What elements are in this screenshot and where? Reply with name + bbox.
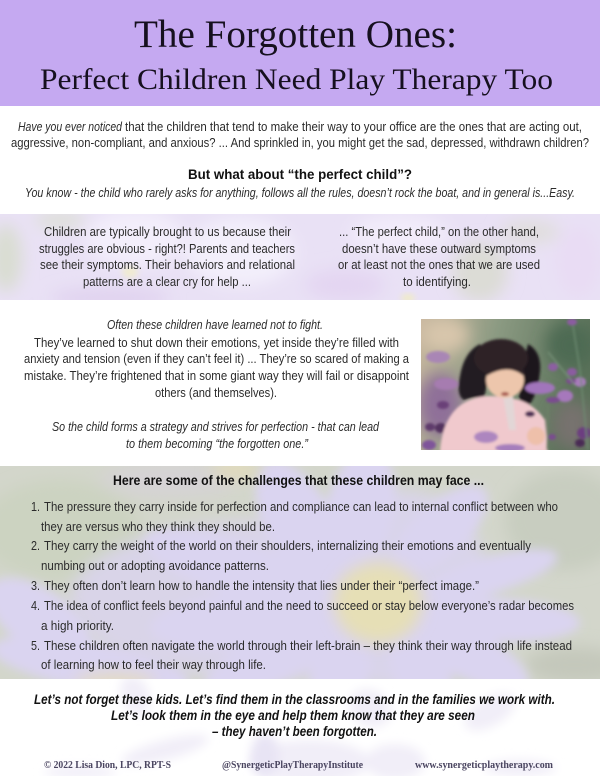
title line 1: The Forgotten Ones: — [134, 13, 457, 56]
right column text: or at least not the ones that we are used — [338, 258, 540, 272]
title line 2: Perfect Children Need Play Therapy Too — [40, 63, 553, 96]
challenge 1 — [31, 500, 558, 534]
challenge 1: they are versus who they think they should be. — [41, 520, 275, 534]
challenge 1: The pressure they carry inside for perfection and compliance can lead to internal conflict between who — [44, 500, 558, 514]
closing message — [34, 692, 555, 739]
left pigtail — [459, 344, 490, 400]
text block: learned not to fight: to them becoming “the forgotten one.” — [126, 437, 309, 451]
band background flowers — [0, 214, 600, 300]
text block: learned not to fight: So the child forms a strategy and strives for perfection - that can lead — [52, 420, 380, 434]
right column text: to identifying. — [403, 275, 471, 289]
challenge 3: They often don’t learn how to handle the intensity that lies under their “perfect image.” — [44, 579, 479, 593]
challenge 3: 3. — [31, 579, 40, 593]
challenge 5: 5. — [31, 639, 40, 653]
text block: learned not to fight: Often these children have learned not to fight. — [107, 318, 323, 332]
hand — [527, 427, 545, 445]
intro text — [11, 120, 589, 150]
right column text: doesn’t have these outward symptoms — [342, 242, 536, 256]
closing message: – they haven’t been forgotten. — [212, 724, 377, 739]
header banner — [0, 0, 600, 106]
flowers — [525, 382, 555, 394]
left column text: patterns are a clear cry for help ... — [83, 275, 251, 289]
subheading: perfect child: But what about “the perfect child”? — [188, 167, 412, 182]
challenge 2: numbing out or adopting avoidance patterns. — [41, 559, 269, 573]
left column text: see their symptoms. Their behaviors and relational — [40, 258, 295, 272]
challenge 2: 2. — [31, 539, 40, 553]
challenges heading: Here are some of the challenges that these children may face ... — [113, 473, 484, 488]
challenge 2 — [31, 539, 532, 573]
left column text: struggles are obvious - right?! Parents and teachers — [39, 242, 295, 256]
challenge 4: 4. — [31, 599, 40, 613]
closing message: Let’s look them in the eye and help them know that they are seen — [111, 708, 475, 723]
challenge 4: a high priority. — [41, 619, 114, 633]
right column text — [338, 225, 540, 289]
photo: girl among purple flowers — [418, 317, 594, 452]
challenges band background: daisy — [0, 466, 600, 679]
footer background: faint flowers — [44, 671, 556, 776]
head of hair — [474, 339, 528, 377]
right pigtail — [519, 344, 540, 410]
intro text: Have you ever noticed — [18, 120, 123, 134]
challenge 5 — [31, 639, 572, 672]
text block: learned not to fight — [24, 318, 409, 451]
challenge 4 — [31, 599, 574, 633]
panel: challenges band — [0, 466, 600, 679]
text block: learned not to fight: They’ve learned to shut down their emotions, yet inside they’re filled with — [34, 336, 399, 350]
face — [486, 362, 524, 398]
challenge 2: They carry the weight of the world on their shoulders, internalizing their emotions and eventually — [44, 539, 532, 553]
challenge 1: 1. — [31, 500, 40, 514]
challenge 5: of learning how to feel their way through life. — [41, 658, 266, 672]
left column text: Children are typically brought to us because their — [44, 225, 291, 239]
text block: learned not to fight: mistake. They’re frightened that in some giant way they will fail or disappoint — [24, 369, 409, 383]
footer: website: www.synergeticplaytherapy.com — [415, 760, 554, 771]
footer: copyright: © 2022 Lisa Dion, LPC, RPT-S — [44, 760, 171, 771]
text block: learned not to fight: others (and themselves). — [155, 386, 277, 400]
footer: social handle: @SynergeticPlayTherapyInstitute — [222, 760, 364, 771]
panel: symptoms band — [0, 214, 600, 300]
left column text — [39, 225, 295, 289]
right column text: ... “The perfect child,” on the other hand, — [339, 225, 539, 239]
text block: learned not to fight: anxiety and tension (even if they can’t feel it) ... They’re so scared of making a — [24, 352, 409, 366]
jacket — [440, 396, 548, 452]
